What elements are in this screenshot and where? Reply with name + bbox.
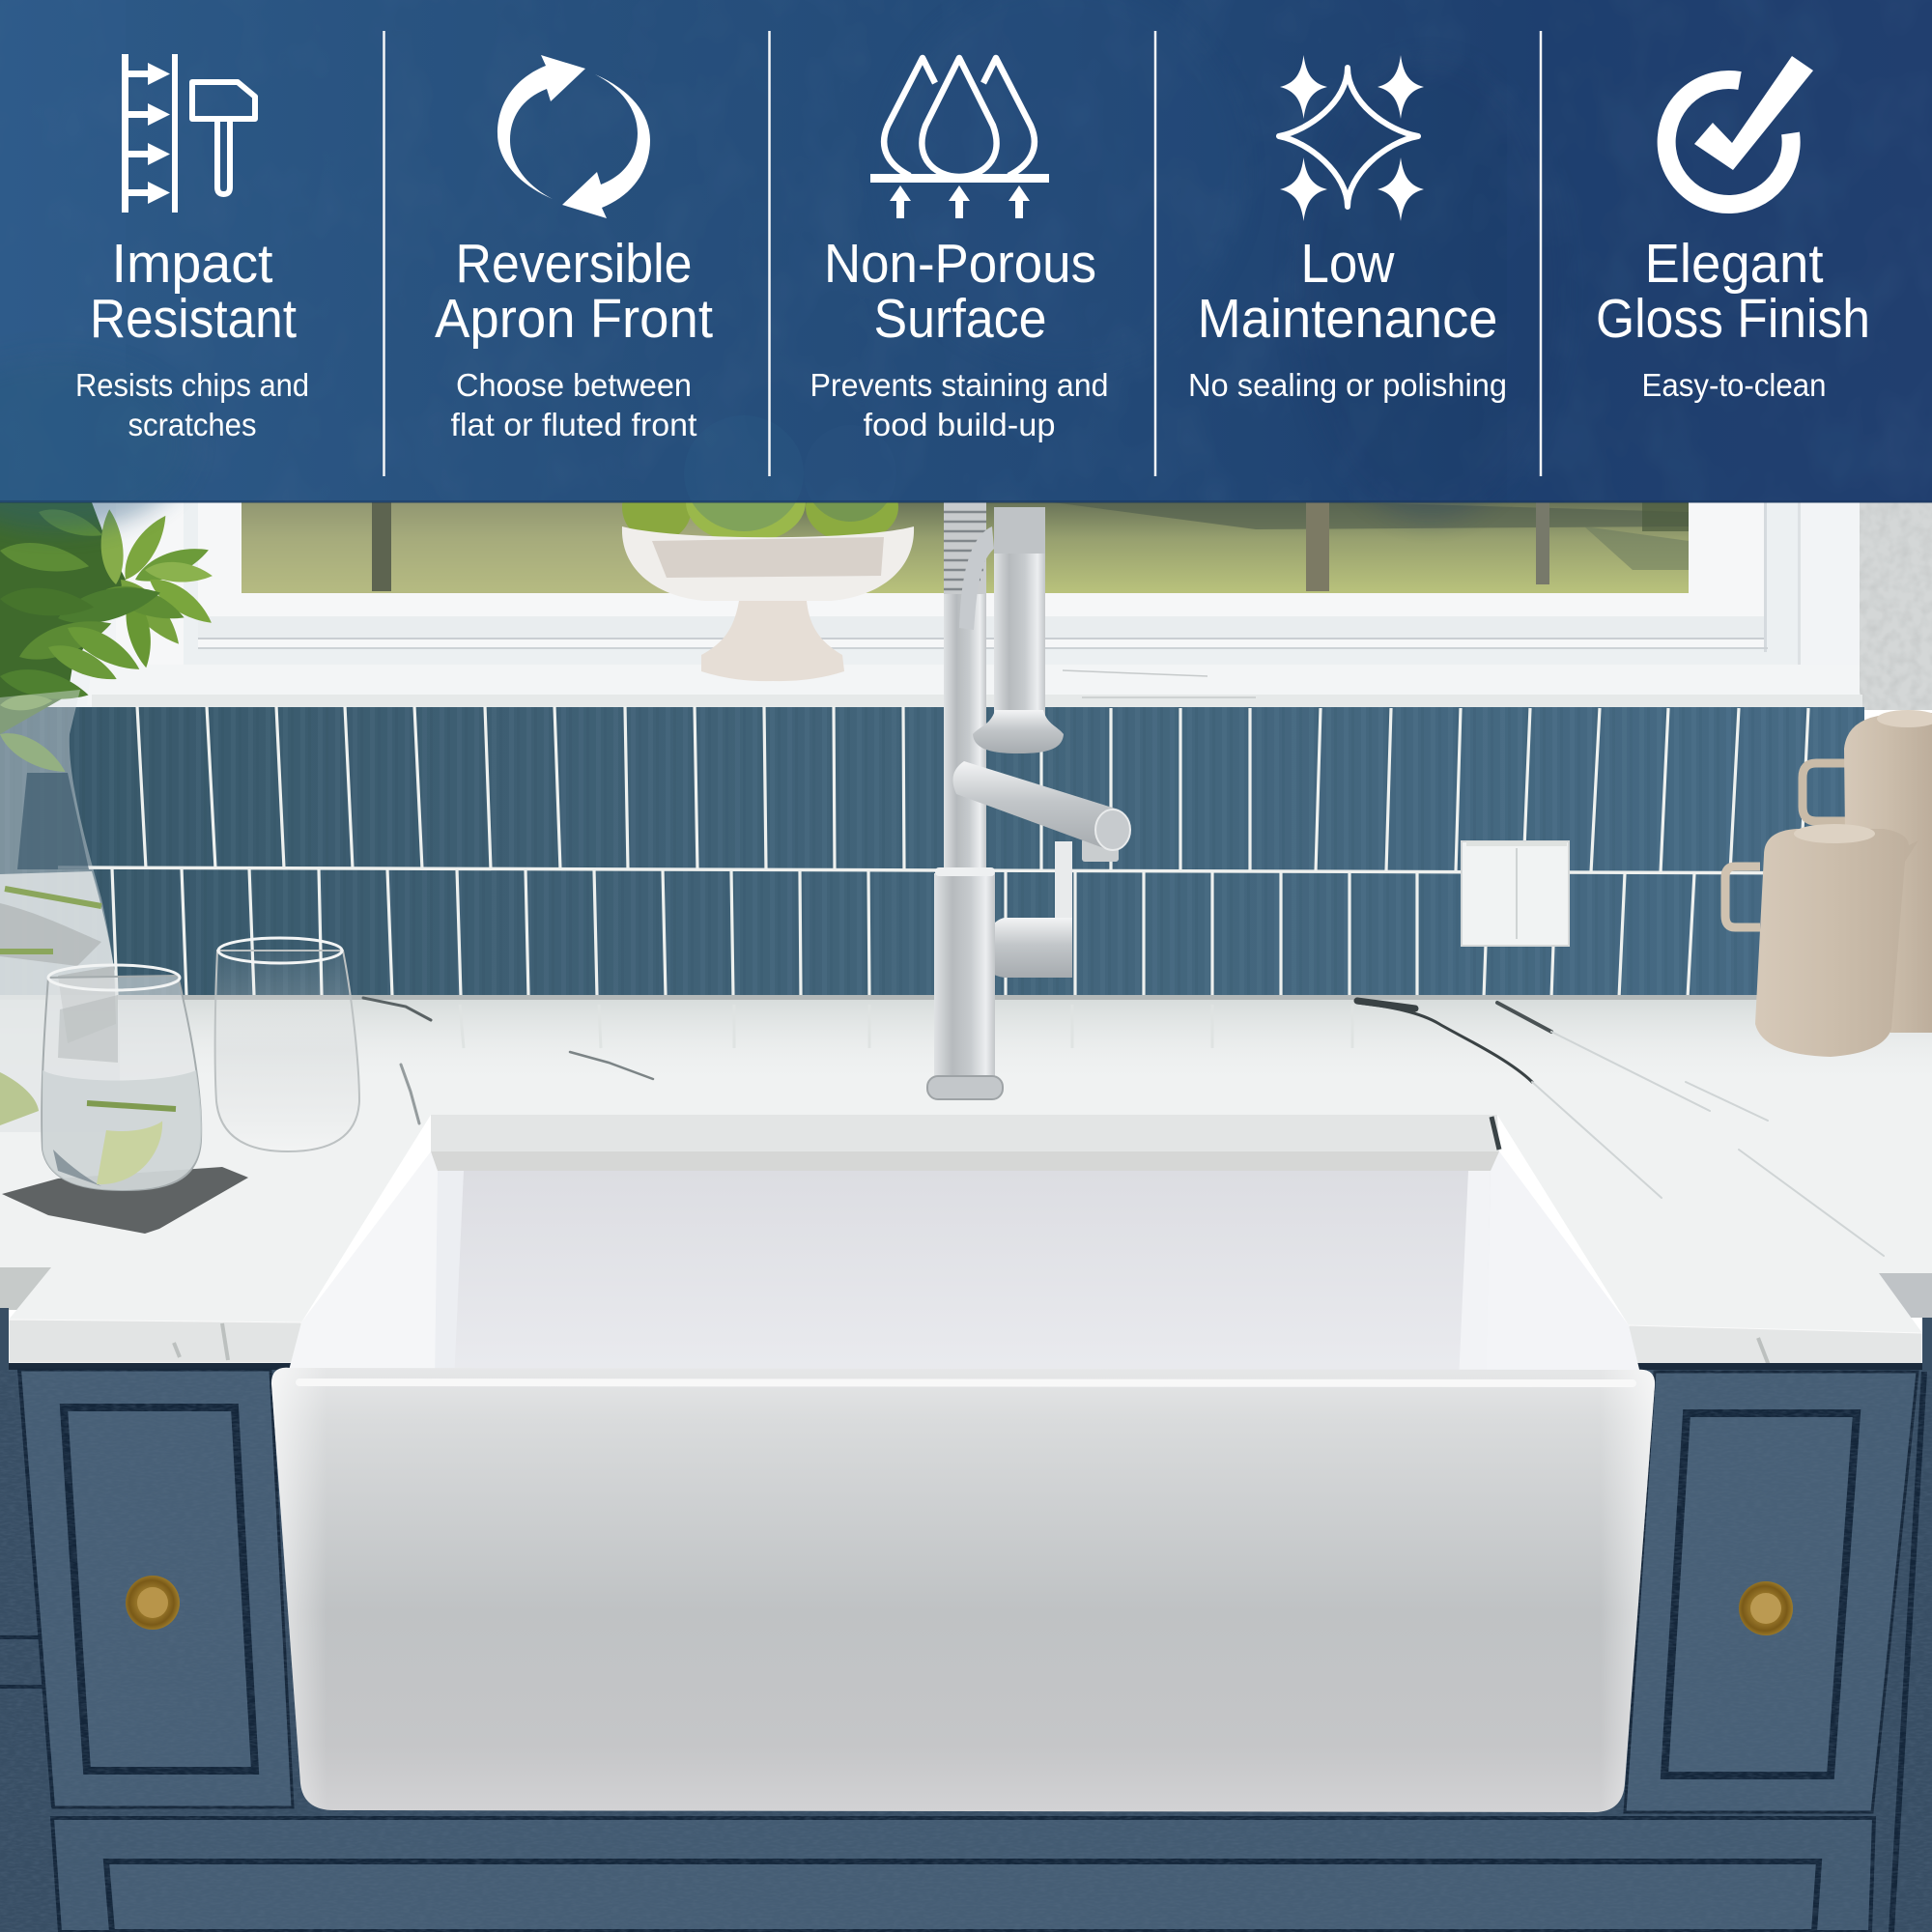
lime wedge <box>97 1121 162 1184</box>
marble countertop <box>0 998 1932 1369</box>
heading: Apron Front <box>435 288 713 350</box>
basin right wall <box>1486 1151 1642 1381</box>
heading <box>435 233 713 350</box>
spout arm <box>952 761 1119 850</box>
panel: non-porous surface <box>810 58 1109 442</box>
water <box>43 1070 202 1190</box>
lever handle <box>1055 841 1072 919</box>
description: Easy-to-clean <box>1642 367 1826 403</box>
spring coil <box>944 502 986 599</box>
heading: Low <box>1300 233 1395 295</box>
basin left wall <box>286 1151 442 1381</box>
back stone ledge <box>431 1115 1499 1151</box>
description: Choose between <box>456 367 692 403</box>
fruit bowl with apples <box>622 462 914 681</box>
pedestal <box>701 601 844 681</box>
bottom drawer inset <box>106 1861 1819 1932</box>
grey corner behind right counter <box>1879 1273 1932 1318</box>
right brass knob <box>1739 1581 1793 1635</box>
spray head top <box>994 507 1045 555</box>
pitcher lid disc <box>1794 824 1875 843</box>
wood grain texture <box>0 1370 1932 1932</box>
cabinetry <box>0 1308 1932 1932</box>
description: food build-up <box>864 407 1055 442</box>
banner background <box>0 0 1932 502</box>
ledge groove <box>431 1151 1499 1173</box>
icon: wall and hammer <box>122 54 255 213</box>
glass carafe with lime water <box>0 690 120 1132</box>
left counter front edge <box>9 1320 301 1363</box>
kitchen scene background <box>0 502 1932 1369</box>
back pitcher <box>1803 710 1932 1033</box>
panel: reversible apron front <box>435 55 713 442</box>
description: Resists chips and <box>75 367 309 403</box>
icon: circular arrows <box>497 55 650 218</box>
lime slices <box>0 889 101 952</box>
front pitcher <box>1725 824 1918 1057</box>
left door panel <box>19 1370 293 1807</box>
far left cabinet lines <box>0 1370 53 1807</box>
bottom drawer <box>52 1818 1874 1932</box>
spray head <box>994 554 1045 718</box>
heading: Impact <box>112 233 273 295</box>
icon: water drops with arrows <box>870 58 1049 218</box>
bowl rim band <box>652 537 884 578</box>
heading <box>1596 233 1870 350</box>
right door inset outline <box>1664 1413 1857 1776</box>
description: No sealing or polishing <box>1188 367 1507 403</box>
glass reflections <box>58 995 118 1063</box>
right counter front edge <box>1629 1325 1922 1369</box>
heading <box>1198 233 1497 350</box>
column dividers <box>384 31 1541 476</box>
spout end cap <box>1095 810 1130 850</box>
handle body <box>979 918 1072 978</box>
carafe body <box>0 690 120 1132</box>
marble bowl <box>622 526 914 601</box>
heading <box>90 233 297 350</box>
far right cabinet line <box>1891 1372 1924 1932</box>
lower water shadow <box>53 1150 101 1186</box>
basin back wall <box>437 1171 1492 1381</box>
description: Prevents staining and <box>810 367 1109 403</box>
description: scratches <box>128 407 257 442</box>
window frame and wall <box>0 502 1932 710</box>
spray flange <box>973 710 1064 753</box>
plant leaves <box>0 502 218 781</box>
ledge vein <box>1492 1117 1499 1150</box>
icon: sparkles <box>1279 55 1424 221</box>
lower column <box>934 873 995 1078</box>
heading: Surface <box>873 288 1047 350</box>
carafe reflections <box>0 903 116 1043</box>
tile seen through carafe <box>17 773 89 869</box>
apples <box>622 462 898 543</box>
heading: Elegant <box>1644 233 1824 295</box>
heading: Gloss Finish <box>1596 288 1870 350</box>
nozzle <box>1082 838 1119 862</box>
lime slice <box>87 1103 176 1109</box>
base ring <box>927 1076 1003 1099</box>
panel: elegant gloss finish <box>1596 56 1870 403</box>
lime wedge <box>0 1072 39 1125</box>
napkin <box>2 1167 248 1234</box>
panel: low maintenance <box>1188 55 1507 403</box>
pitcher handle <box>1803 763 1847 821</box>
basin right inner corner <box>1459 1171 1491 1381</box>
banner bottom shadow edge <box>0 500 1932 503</box>
feature banner <box>0 0 1932 531</box>
grout reflections <box>460 1005 1352 1048</box>
tile reflection on counter <box>0 1000 1932 1087</box>
faucet <box>927 502 1130 1099</box>
left brass knob <box>126 1576 180 1630</box>
wall switch plate <box>1462 841 1569 946</box>
carafe contents <box>0 871 120 1132</box>
view through the window <box>242 502 1689 593</box>
under-counter shadow <box>9 1363 1922 1370</box>
left door inset outline <box>64 1407 255 1771</box>
heading: Non-Porous <box>824 233 1096 295</box>
pitcher lid <box>1877 710 1932 727</box>
panel: impact resistant <box>75 54 309 442</box>
left glass with water and lime <box>42 965 202 1190</box>
heading: Maintenance <box>1198 288 1497 350</box>
description: flat or fluted front <box>450 407 697 442</box>
connector hose <box>959 526 994 630</box>
right door panel <box>1625 1372 1918 1812</box>
icon: circled check <box>1666 56 1813 204</box>
right glass <box>215 938 359 1151</box>
front edge veining <box>174 1323 1770 1368</box>
window sill <box>87 665 1862 707</box>
cabinet base <box>0 1308 1932 1932</box>
description <box>450 367 697 442</box>
marble veins <box>363 998 1884 1256</box>
apron rim highlight <box>299 1382 1633 1383</box>
tile backsplash <box>0 706 1864 1000</box>
pitcher body <box>1755 829 1918 1057</box>
foliage mass <box>0 502 126 734</box>
rim <box>48 965 180 990</box>
description <box>75 367 309 442</box>
description <box>810 367 1109 442</box>
pitcher body <box>1844 713 1932 1033</box>
glass body <box>42 976 201 1190</box>
ghosted scene behind banner <box>0 0 1874 531</box>
counter top surface <box>0 1000 1932 1333</box>
heading: Resistant <box>90 288 297 350</box>
basin left inner corner <box>435 1171 464 1381</box>
pitcher handle <box>1725 867 1760 927</box>
apron front <box>271 1368 1655 1812</box>
banner mottling <box>0 0 1932 502</box>
heading <box>824 233 1096 350</box>
upper column <box>944 594 986 874</box>
apron side highlights <box>271 1368 1655 1812</box>
heading: Reversible <box>456 233 692 295</box>
grey corner behind left counter <box>0 1267 51 1310</box>
collar <box>935 867 995 876</box>
farmhouse sink <box>271 1115 1655 1812</box>
